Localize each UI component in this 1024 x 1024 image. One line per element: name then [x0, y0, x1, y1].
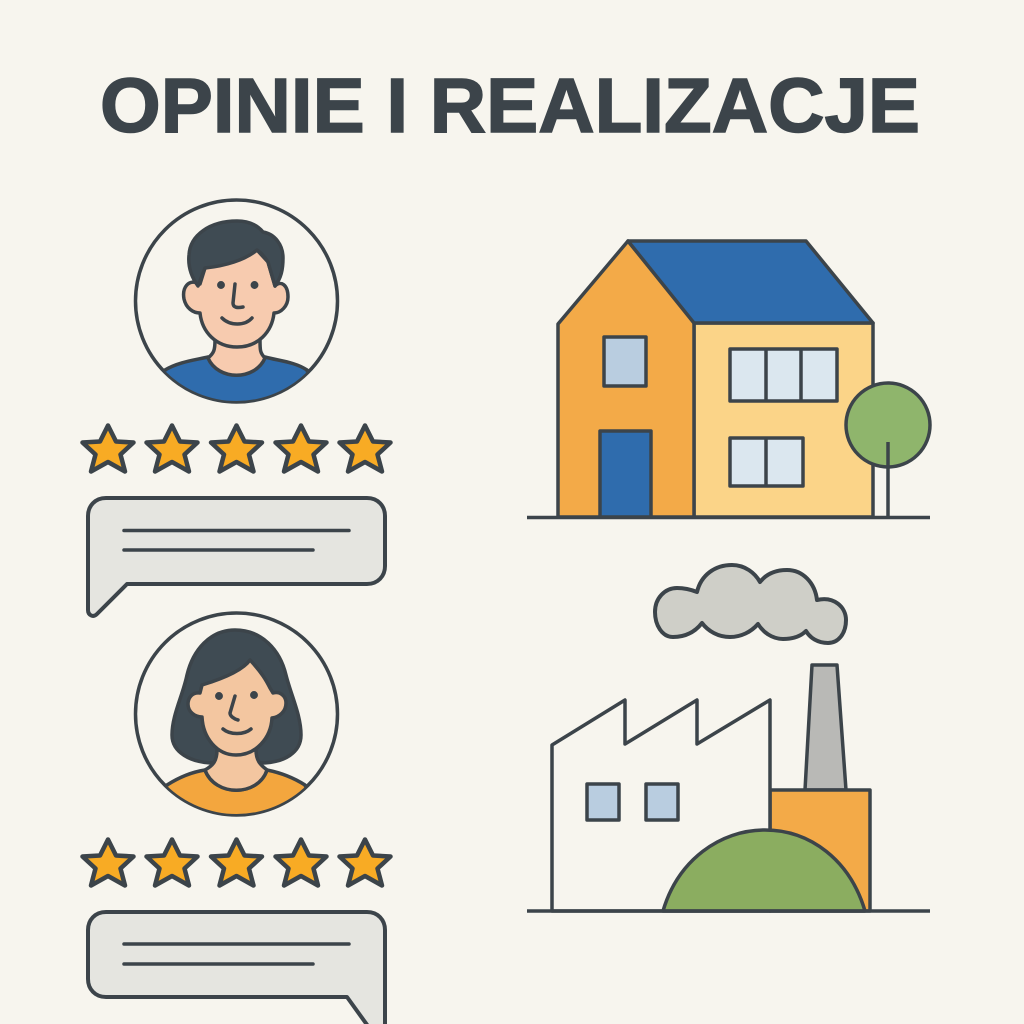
chimney	[805, 665, 846, 790]
house small window	[604, 337, 646, 386]
man neck	[208, 340, 265, 375]
woman neck	[205, 750, 267, 790]
stars row 1	[82, 426, 390, 472]
woman face	[188, 660, 286, 755]
man shirt	[164, 355, 308, 401]
green hill	[663, 830, 865, 911]
man face	[184, 250, 288, 347]
woman hair back	[172, 630, 301, 763]
house illustration	[527, 241, 930, 518]
house roof	[628, 241, 873, 323]
house triple window	[730, 349, 837, 401]
woman eyes and nose and mouth	[217, 693, 256, 734]
speech bubble 1	[88, 498, 385, 616]
house right wall	[694, 323, 873, 517]
tree	[846, 383, 930, 517]
factory illustration	[527, 665, 930, 911]
house left wall	[558, 241, 694, 517]
factory orange block	[770, 790, 870, 911]
title: OPINIE I REALIZACJE	[100, 63, 920, 149]
man hair	[189, 221, 283, 286]
factory windows	[587, 784, 678, 820]
factory building	[552, 700, 770, 911]
avatar: man	[136, 200, 338, 420]
speech bubble 2	[88, 912, 385, 1024]
man eyes and nose and mouth	[219, 283, 257, 324]
woman shirt	[166, 768, 306, 814]
stars row 2	[82, 840, 390, 886]
cloud	[655, 565, 846, 643]
factory ground line	[527, 909, 930, 913]
house door	[600, 431, 651, 517]
house ground line	[527, 516, 930, 519]
house double window	[730, 438, 803, 486]
avatar: woman	[136, 613, 338, 830]
